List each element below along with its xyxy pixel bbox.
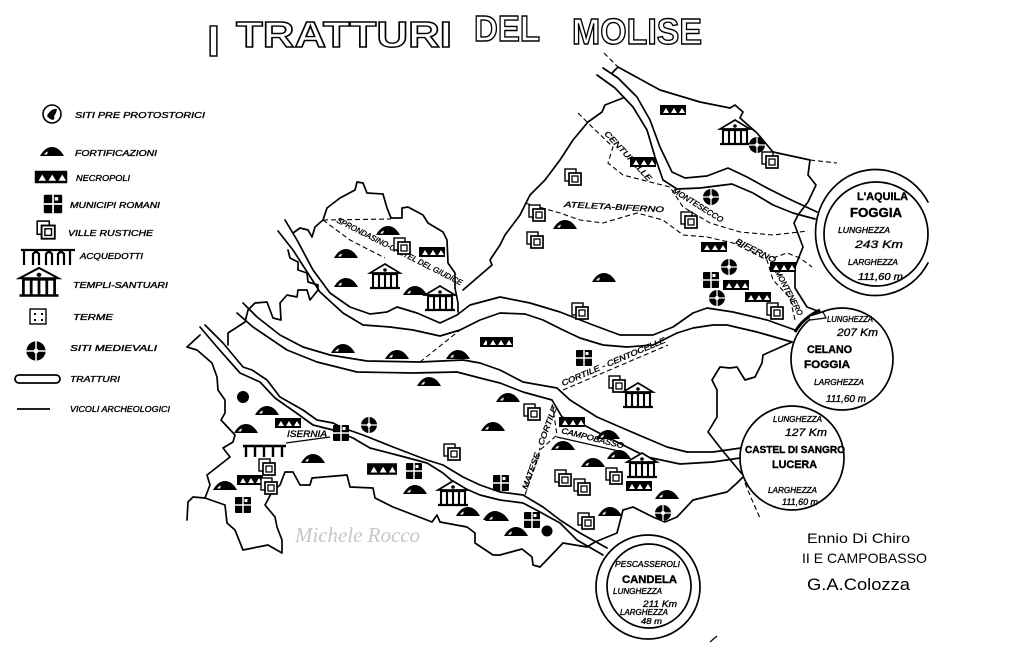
circle: Castel di Sangro-Lucera: 127 Km	[785, 427, 827, 439]
legend: ville rustiche	[37, 221, 154, 239]
legend	[15, 105, 206, 414]
circle: L'Aquila-Foggia: L'AQUILA	[857, 191, 908, 203]
legend: templi-santuari: TEMPLI-SANTUARI	[73, 281, 169, 290]
circle: Castel di Sangro-Lucera: LUNGHEZZA	[773, 415, 822, 424]
small pen mark	[710, 636, 717, 642]
tratturo: Pescasseroli-Candela	[200, 325, 607, 555]
circle: L'Aquila-Foggia: FOGGIA	[850, 205, 903, 220]
circle: Celano-Foggia	[791, 308, 893, 410]
Isernia label	[286, 429, 330, 443]
legend: tratturi	[15, 375, 121, 384]
circle: Castel di Sangro-Lucera: CASTEL DI SANGRO	[745, 445, 845, 456]
region boundary	[187, 53, 837, 567]
legend: necropoli	[35, 171, 131, 183]
tratturello: Ateleta-Biferno	[525, 200, 812, 320]
fortifications	[213, 220, 679, 536]
tratturello: Matese-Cortile	[520, 402, 559, 495]
tratturello: Centurelle-Montesecco	[578, 113, 808, 235]
circle: Celano-Foggia: LARGHEZZA	[814, 378, 864, 387]
title: MOLISE	[572, 11, 702, 52]
circle: Castel di Sangro-Lucera	[740, 406, 845, 518]
tratturello: Cortile-Centocelle: CORTILE - CENTOCELLE	[560, 335, 668, 388]
circle: Castel di Sangro-Lucera: 111,60 m	[782, 497, 818, 507]
author signature: Ennio Di Chiro	[807, 530, 910, 546]
legend: templi-santuari	[20, 268, 169, 296]
tratturello: Matese-Cortile: MATESE - CORTILE	[520, 404, 559, 491]
legend: siti preistorici: SITI PRE PROTOSTORICI	[75, 111, 206, 120]
tratturello: Sprondasino-Castel del Giudice: SPRONDASINO-CASTEL DEL GIUDICE	[335, 216, 464, 288]
tratturello: Centurelle-Montesecco: MONTESECCO	[671, 186, 725, 224]
map of Molise	[187, 53, 837, 567]
author signature: II E CAMPOBASSO	[802, 550, 927, 566]
circle: Pescasseroli-Candela: 48 m	[641, 617, 662, 626]
tratturello: Cortile-Campobasso: CAMPOBASSO	[561, 426, 625, 450]
tratturello: Ateleta-Biferno: MONTENERO	[773, 269, 805, 317]
legend: vicoli archeologici: VICOLI ARCHEOLOGICI	[70, 405, 171, 414]
legend: siti preistorici	[43, 105, 206, 123]
tratturo: L'Aquila-Foggia	[597, 68, 817, 219]
circle: L'Aquila-Foggia: 243 Km	[854, 239, 903, 251]
legend: terme	[30, 309, 114, 324]
tratturello: Ateleta-Biferno: ATELETA-BIFERNO	[563, 200, 664, 214]
tratturo: Celano-Foggia	[278, 220, 795, 347]
municipi	[235, 272, 719, 528]
circle: Pescasseroli-Candela: 211 Km	[642, 599, 678, 609]
necropolises	[237, 105, 796, 491]
circle: L'Aquila-Foggia: LUNGHEZZA	[838, 226, 890, 235]
aqueduct	[243, 446, 286, 457]
temples	[370, 120, 750, 505]
circle: Pescasseroli-Candela: CANDELA	[622, 574, 677, 586]
author signature: G.A.Colozza	[807, 575, 911, 594]
circle: Pescasseroli-Candela: LUNGHEZZA	[613, 587, 662, 596]
circle: Celano-Foggia: 111,60 m	[826, 394, 866, 405]
legend: siti medievali	[26, 341, 158, 361]
author signature	[802, 530, 927, 594]
villas	[259, 152, 783, 529]
legend: tratturi: TRATTURI	[70, 375, 121, 384]
title: DEL	[474, 8, 540, 49]
Isernia label: ISERNIA	[287, 429, 327, 439]
circle: Pescasseroli-Candela	[596, 535, 700, 639]
circle: Celano-Foggia: FOGGIA	[804, 359, 850, 371]
circle: Celano-Foggia: LUNGHEZZA	[827, 315, 873, 324]
circle: Celano-Foggia: 207 Km	[836, 327, 878, 339]
title	[207, 8, 702, 66]
circle: Pescasseroli-Candela: LARGHEZZA	[620, 608, 668, 617]
watermark: Michele Rocco	[294, 523, 420, 547]
circle: Castel di Sangro-Lucera: LUCERA	[772, 459, 817, 471]
medieval sites	[361, 137, 765, 521]
legend: necropoli: NECROPOLI	[76, 174, 131, 183]
circle: L'Aquila-Foggia	[816, 170, 928, 296]
legend: acquedotti: ACQUEDOTTI	[79, 252, 144, 261]
legend: ville rustiche: VILLE RUSTICHE	[68, 229, 154, 238]
legend: terme: TERME	[73, 313, 114, 322]
tratturello: Centurelle-Montesecco: CENTURELLE	[603, 129, 654, 183]
title: TRATTURI	[236, 14, 452, 55]
circle: Pescasseroli-Candela: PESCASSEROLI	[615, 560, 681, 569]
dashed link between tratturi	[420, 330, 460, 362]
circle: L'Aquila-Foggia: 111,60 m	[858, 272, 903, 283]
circle: Castel di Sangro-Lucera: LARGHEZZA	[768, 486, 817, 495]
title: I	[207, 17, 220, 66]
circle: Celano-Foggia: CELANO	[807, 344, 852, 356]
legend: acquedotti	[21, 250, 144, 265]
tratturo: Castel di Sangro-Lucera	[237, 303, 741, 464]
tratturello: Ateleta-Biferno: BIFERNO	[734, 237, 777, 265]
legend: fortificazioni	[40, 147, 158, 158]
legend: siti medievali: SITI MEDIEVALI	[70, 344, 158, 353]
circle: L'Aquila-Foggia: LARGHEZZA	[848, 258, 898, 267]
legend: municipi romani	[44, 195, 161, 213]
legend: fortificazioni: FORTIFICAZIONI	[75, 149, 158, 158]
legend: municipi romani: MUNICIPI ROMANI	[70, 201, 161, 210]
protohistoric dots	[237, 391, 552, 536]
